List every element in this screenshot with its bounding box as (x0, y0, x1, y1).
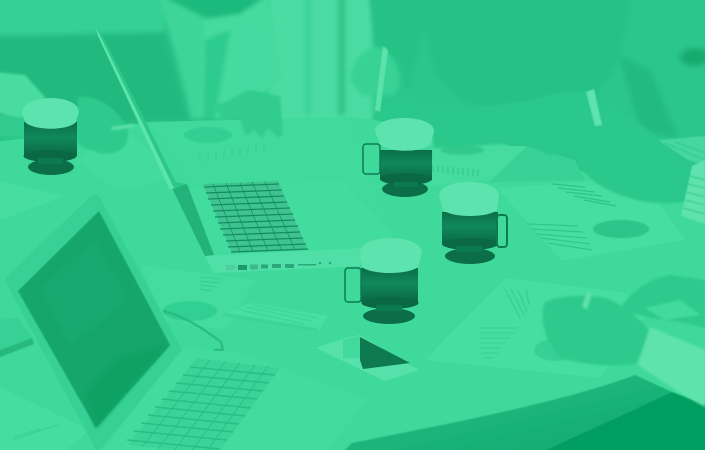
paper: behind right cups (430, 145, 585, 186)
background room (0, 0, 705, 190)
pen (375, 46, 388, 112)
pie chart (593, 220, 649, 238)
central laptop (96, 27, 393, 273)
bar chart (527, 224, 592, 250)
pen in right hand (586, 89, 602, 126)
base (100, 349, 368, 450)
chart stripes (433, 166, 478, 176)
person right: hands with pen (571, 104, 690, 203)
cup 4 (345, 238, 422, 324)
arm and hand on table (372, 91, 603, 155)
scribble chart (505, 289, 529, 318)
paper: bottom right with charts (425, 278, 655, 378)
hand holding pen: upper centre (350, 47, 399, 96)
pie chart (534, 339, 578, 361)
phone (316, 335, 419, 381)
striped cuff (658, 136, 705, 224)
bar chart (480, 328, 518, 358)
table edge and floor (340, 375, 705, 450)
cup 2 (363, 118, 434, 197)
person left: white shirt (158, 0, 282, 118)
cup 1 (22, 98, 79, 175)
paper: lower middle with pie (140, 265, 255, 330)
cup 3 (439, 182, 507, 264)
screen (18, 211, 170, 428)
paper: right with charts (497, 178, 686, 261)
pointing hand at laptop (210, 90, 283, 138)
table surface (0, 117, 705, 450)
paper: bottom left (0, 385, 90, 450)
shirt cuff (638, 327, 705, 407)
bar chart (552, 184, 616, 206)
hinge (172, 184, 214, 256)
keyboard (203, 181, 308, 253)
notebook at left edge (0, 318, 34, 359)
paper: left of central laptop (77, 118, 392, 235)
glasses (163, 311, 223, 350)
keyboard (127, 358, 280, 450)
left sleeve (0, 72, 45, 138)
person right top: sweater (369, 0, 632, 106)
bottom-left laptop (6, 194, 368, 450)
pie chart (163, 301, 217, 321)
pie chart on paper (184, 127, 232, 143)
hand left holding pen (76, 97, 134, 154)
port row (226, 262, 331, 270)
chart stripes (200, 277, 222, 291)
lid seen from side (96, 27, 186, 190)
bar chart on paper (200, 144, 264, 162)
front strip with ports (205, 248, 364, 273)
base (178, 180, 393, 272)
lid (6, 194, 182, 450)
calculator (222, 303, 328, 332)
paper: left edge (0, 180, 65, 222)
person bottom right: hand with pen and cuff (543, 275, 705, 407)
